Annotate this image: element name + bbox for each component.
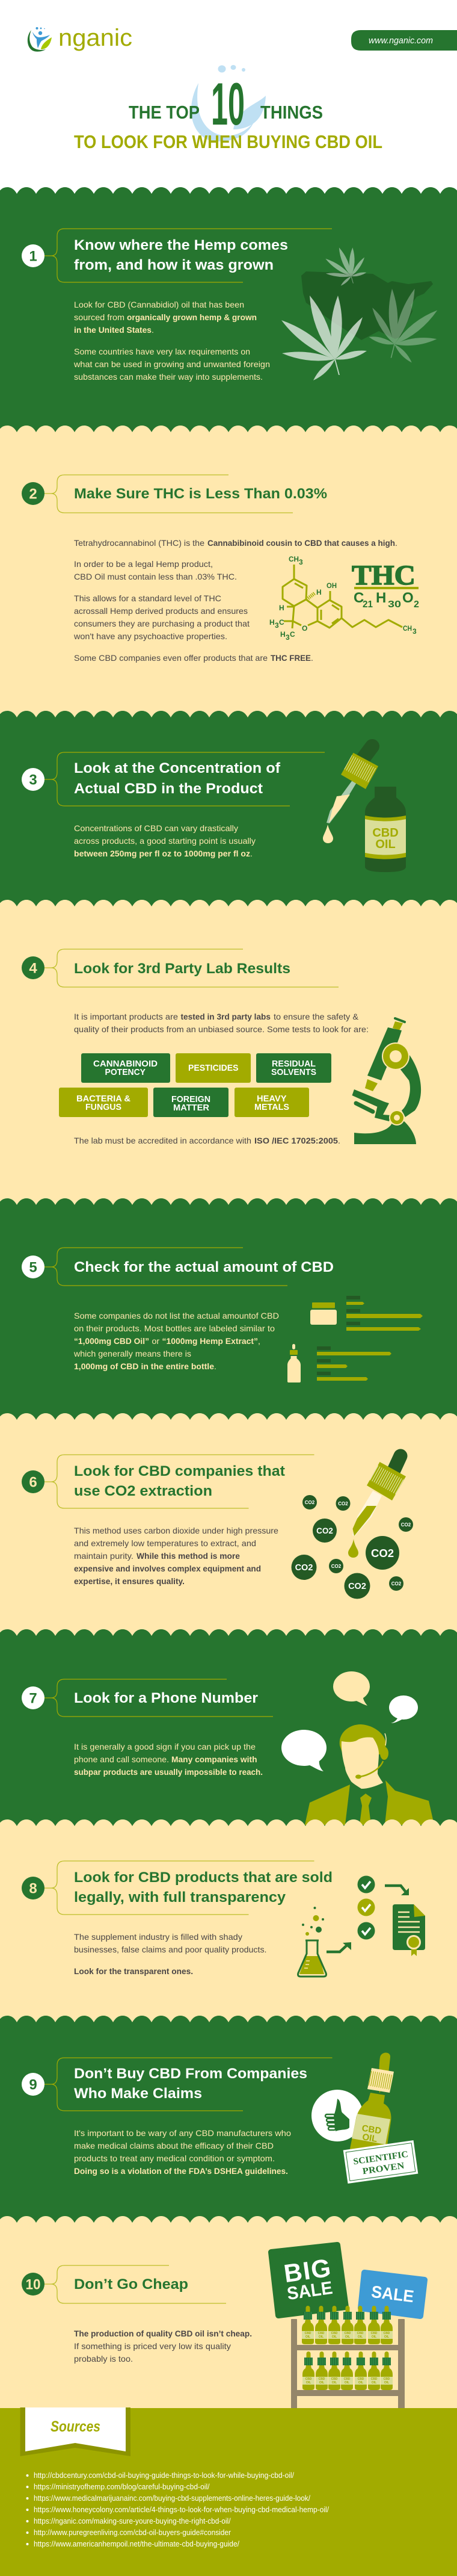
chart: THC molecule: 3 xyxy=(286,633,290,642)
icon: bottle with label bars xyxy=(287,1344,391,1382)
sign: big sale: SALE xyxy=(286,2278,334,2304)
sign: big sale xyxy=(271,2245,346,2315)
panel: step 7 phone number xyxy=(0,1629,457,1828)
accreditation text: . xyxy=(338,1136,340,1145)
shelf with bottles: OIL xyxy=(372,2381,376,2385)
number badge 8 xyxy=(22,1861,314,1915)
body text: Some companies do not list the actual amountof CBD xyxy=(74,1311,279,1321)
heading: Know where the Hemp comes xyxy=(74,237,288,253)
body text: what can be used in growing and unwanted foreign xyxy=(73,359,270,369)
number badge 8: 8 xyxy=(29,1880,37,1897)
heading: Who Make Claims xyxy=(74,2085,202,2102)
body text: Tetrahydrocannabinol (THC) is the xyxy=(74,538,204,548)
body text: It is important products are xyxy=(74,1012,178,1021)
shelf with bottles: OIL xyxy=(306,2381,311,2385)
heading: Actual CBD in the Product xyxy=(74,781,263,797)
icon: CBD oil bottle xyxy=(365,787,406,872)
body text: While this method is more xyxy=(136,1551,240,1561)
title: THINGS xyxy=(260,102,323,123)
body text: This method uses carbon dioxide under high pressure xyxy=(74,1526,278,1535)
body text: The production of quality CBD oil isn’t cheap. xyxy=(74,2329,252,2338)
heading: Look at the Concentration of xyxy=(74,760,281,776)
THC formula: H xyxy=(376,590,386,606)
panel: step 9 medical claims xyxy=(0,2016,457,2225)
tag: foreign matter: FOREIGN xyxy=(171,1094,210,1104)
THC formula: 30 xyxy=(388,599,401,610)
body text: “1000mg Hemp Extract” xyxy=(162,1336,258,1346)
body text: sourced from xyxy=(74,312,124,322)
panel: step 8 legal and transparent xyxy=(0,1819,457,2025)
tag: residual solvents: RESIDUAL xyxy=(272,1059,316,1069)
body text xyxy=(74,1742,263,1777)
source list: https://www.honeycolony.com/article/4-things-to-look-for-when-buying-cbd-medical-hemp-oil/ xyxy=(34,2506,330,2514)
number badge 5 xyxy=(22,1248,287,1286)
body text: . xyxy=(214,1361,216,1371)
shelf with bottles: CBD xyxy=(371,2377,378,2381)
body text: substances can make their way into supplements. xyxy=(74,372,263,382)
title: THE TOP xyxy=(129,102,200,123)
body text: If something is priced very low its quality xyxy=(74,2341,231,2351)
body text: . xyxy=(311,653,313,663)
body text: probably is too. xyxy=(74,2354,133,2364)
icon: CBD oil bottle: CBD xyxy=(361,2123,382,2136)
shelf with bottles: CBD xyxy=(318,2332,325,2335)
shelf with bottles: OIL xyxy=(358,2335,363,2339)
body text: “1,000mg CBD Oil” xyxy=(74,1336,149,1346)
CO2 bubbles: CO2 xyxy=(348,1582,366,1591)
panel: step 10 price xyxy=(0,2216,457,2409)
panel: step 1 hemp origin xyxy=(0,187,457,435)
body text: organically grown hemp & grown xyxy=(127,312,257,322)
body text xyxy=(74,1012,369,1034)
CO2 bubbles: CO2 xyxy=(401,1522,411,1528)
heading: Don’t Buy CBD From Companies xyxy=(74,2066,307,2082)
website pill xyxy=(351,30,457,51)
icon: support agent xyxy=(305,1724,434,1825)
body text xyxy=(74,1932,267,1976)
body text: 1,000mg of CBD in the entire bottle xyxy=(74,1361,214,1371)
body text: in the United States xyxy=(74,325,152,335)
shelf with bottles: CBD xyxy=(305,2377,312,2381)
shelf with bottles: OIL xyxy=(384,2381,389,2385)
heading: Check for the actual amount of CBD xyxy=(74,1259,334,1275)
number badge 1 xyxy=(22,229,332,282)
accreditation text xyxy=(74,1136,340,1145)
tag: pesticides: PESTICIDES xyxy=(188,1063,238,1073)
shelf with bottles: OIL xyxy=(332,2335,337,2339)
shelf with bottles: OIL xyxy=(384,2335,389,2339)
body text: on their products. Most bottles are labeled similar to xyxy=(74,1324,275,1333)
body text xyxy=(73,300,270,382)
chart: THC molecule: C xyxy=(279,618,284,627)
chart: THC molecule: O xyxy=(302,624,307,633)
chart: THC molecule: H xyxy=(280,630,286,639)
chart: THC molecule: H xyxy=(279,604,284,612)
shelf with bottles: CBD xyxy=(305,2332,311,2335)
chart: THC molecule: OH xyxy=(327,581,337,590)
number badge 3: 3 xyxy=(29,772,37,788)
heading: Look for CBD products that are sold xyxy=(74,1869,333,1886)
accreditation text: The lab must be accredited in accordance with xyxy=(74,1136,251,1145)
tag: foreign matter xyxy=(153,1088,228,1117)
illustration: US map and hemp leaves xyxy=(281,247,437,380)
body text: tested in 3rd party labs xyxy=(180,1012,271,1021)
body text xyxy=(73,1311,279,1371)
body text: . xyxy=(152,325,154,335)
number badge 2: 2 xyxy=(29,486,37,502)
shelf with bottles: CBD xyxy=(384,2377,390,2381)
source list xyxy=(26,2471,330,2548)
source list: https://www.americanhempoil.net/the-ultimate-cbd-buying-guide/ xyxy=(34,2540,240,2548)
heading xyxy=(74,2066,307,2102)
body text: subpar products are usually impossible to reach. xyxy=(74,1767,263,1777)
body text: This allows for a standard level of THC xyxy=(74,593,221,603)
title: TO LOOK FOR WHEN BUYING CBD OIL xyxy=(74,131,382,152)
number badge 6 xyxy=(22,1455,314,1508)
tag: heavy metals: HEAVY xyxy=(257,1094,286,1104)
CO2 bubbles: CO2 xyxy=(391,1581,402,1587)
CO2 bubbles: CO2 xyxy=(338,1501,348,1506)
chart: THC molecule: 3 xyxy=(413,627,417,636)
body text xyxy=(74,1526,278,1586)
chart: THC molecule: C xyxy=(290,630,295,639)
shelf with bottles: OIL xyxy=(332,2381,337,2385)
body text: Cannabibinoid cousin to CBD that causes a high xyxy=(207,538,395,548)
logo: nganic xyxy=(58,25,132,51)
shelf with bottles: CBD xyxy=(358,2377,364,2381)
body text xyxy=(73,538,397,663)
heading xyxy=(74,1869,333,1906)
body text: Some countries have very lax requirements on xyxy=(74,347,250,356)
panel: step 4 lab results xyxy=(0,900,457,1207)
stamp: scientific proven: PROVEN xyxy=(362,2161,405,2176)
CO2 bubbles: CO2 xyxy=(371,1547,394,1559)
chart: THC molecule xyxy=(269,555,417,642)
tag: pesticides xyxy=(176,1053,251,1083)
tag: cannabinoid potency: CANNABINOID xyxy=(93,1059,158,1069)
body text: . xyxy=(250,849,253,858)
icon: CBD oil bottle: OIL xyxy=(361,2132,378,2144)
heading: use CO2 extraction xyxy=(74,1483,212,1499)
number badge 3 xyxy=(22,752,325,806)
body text: won't have any psychoactive properties. xyxy=(73,631,227,641)
THC formula: C xyxy=(354,590,364,606)
heading: legally, with full transparency xyxy=(74,1889,286,1906)
CO2 bubbles: CO2 xyxy=(295,1563,313,1573)
shelf with bottles: CBD xyxy=(331,2332,338,2335)
body text: Doing so is a violation of the FDA’s DSHEA guidelines. xyxy=(74,2166,288,2176)
icon: dropper xyxy=(323,746,378,843)
arrow: checklist to certificate xyxy=(385,1886,409,1895)
THC formula: 2 xyxy=(414,599,419,610)
number badge 4 xyxy=(22,949,339,987)
number badge 1: 1 xyxy=(29,248,37,265)
sources ribbon: Sources xyxy=(51,2418,100,2435)
number badge 7: 7 xyxy=(29,1690,37,1707)
icon: thumbs up xyxy=(311,2090,363,2141)
shelf with bottles: CBD xyxy=(344,2377,351,2381)
source list: http://www.puregreenliving.com/cbd-oil-buyers-guide#consider xyxy=(34,2528,231,2537)
chart: THC molecule: CH xyxy=(289,555,299,563)
CO2 bubbles xyxy=(291,1495,413,1599)
THC formula: 21 xyxy=(363,599,373,610)
panel: step 3 concentration xyxy=(0,711,457,909)
panel: step 5 actual amount xyxy=(0,1198,457,1423)
website pill: www.nganic.com xyxy=(369,36,433,46)
sign: big sale: BIG xyxy=(282,2253,333,2288)
tag: bacteria and fungus: FUNGUS xyxy=(85,1102,121,1112)
panel: step 2 THC xyxy=(0,426,457,720)
title xyxy=(74,70,382,152)
CO2 bubbles: CO2 xyxy=(331,1564,342,1569)
chart: THC molecule: H xyxy=(316,588,322,596)
chart: THC molecule: 3 xyxy=(275,621,279,630)
shelf with bottles: CBD xyxy=(319,2377,325,2381)
source list: https://nganic.com/making-sure-youre-buying-the-right-cbd-oil/ xyxy=(34,2517,231,2525)
icon: dropper with drop xyxy=(348,1456,406,1558)
heading: from, and how it was grown xyxy=(74,257,274,273)
arrow: flask to checklist xyxy=(327,1942,351,1952)
body text: to ensure the safety & xyxy=(274,1012,359,1021)
body text: It's important to be wary of any CBD manufacturers who xyxy=(74,2128,291,2138)
tag: cannabinoid potency: POTENCY xyxy=(105,1067,146,1077)
panel: header xyxy=(28,25,457,152)
body text: consumers they are purchasing a product that xyxy=(74,619,250,628)
body text: Look for the transparent ones. xyxy=(74,1966,193,1976)
body text: In order to be a legal Hemp product, xyxy=(74,559,213,569)
heading: Make Sure THC is Less Than 0.03% xyxy=(74,486,327,502)
number badge 10: 10 xyxy=(25,2276,41,2293)
number badge 9: 9 xyxy=(29,2076,37,2093)
shelf with bottles: OIL xyxy=(319,2381,324,2385)
source list: https://www.medicalmarijuanainc.com/buying-cbd-supplements-online-heres-guide-look/ xyxy=(34,2494,310,2503)
chart: THC molecule: 3 xyxy=(299,558,303,566)
body text: across products, a good starting point is usually xyxy=(74,836,256,846)
title: 10 xyxy=(211,70,245,137)
sign: sale xyxy=(361,2273,425,2316)
icon: CBD oil bottle: CBD xyxy=(372,826,399,840)
body text: expertise, it ensures quality. xyxy=(74,1576,185,1586)
shelf with bottles: OIL xyxy=(319,2335,324,2339)
shelf with bottles: OIL xyxy=(372,2335,376,2339)
speech bubbles xyxy=(281,1671,418,1771)
number badge 2 xyxy=(22,475,293,513)
body text xyxy=(74,2128,291,2176)
body text: products to treat any medical condition or symptom. xyxy=(74,2153,275,2163)
panel: step 6 CO2 extraction xyxy=(0,1413,457,1639)
source list: http://cbdcentury.com/cbd-oil-buying-guide-things-to-look-for-while-buying-cbd-oil/ xyxy=(34,2471,295,2480)
chart: THC molecule: CH xyxy=(403,624,412,633)
number badge 6: 6 xyxy=(29,1475,37,1490)
logo xyxy=(28,25,132,52)
tag: residual solvents xyxy=(256,1053,331,1083)
body text: make medical claims about the efficacy of their CBD xyxy=(74,2141,274,2150)
shelf with bottles: CBD xyxy=(371,2332,378,2335)
body text: or xyxy=(152,1336,159,1346)
body text: acrossall Hemp derived products and ensures xyxy=(74,606,248,616)
shelf with bottles: OIL xyxy=(345,2335,350,2339)
body text: maintain purity. xyxy=(74,1551,133,1561)
icon: CBD oil bottle: OIL xyxy=(375,838,396,851)
body text: Look for CBD (Cannabidiol) oil that has been xyxy=(74,300,244,309)
body text: expensive and involves complex equipment and xyxy=(74,1564,261,1573)
tag: residual solvents: SOLVENTS xyxy=(271,1067,316,1077)
sign: sale: SALE xyxy=(370,2282,415,2306)
THC formula: THC xyxy=(352,560,416,591)
shelf with bottles: OIL xyxy=(358,2381,363,2385)
watermark logo xyxy=(191,65,266,141)
shelf with bottles: CBD xyxy=(331,2377,338,2381)
icon: checklist xyxy=(357,1875,375,1939)
THC formula xyxy=(352,560,419,610)
icon: jar with label bars xyxy=(310,1296,423,1331)
body text: which generally means there is xyxy=(73,1349,191,1358)
icon: flask xyxy=(298,1907,326,1977)
CO2 bubbles: CO2 xyxy=(316,1526,333,1535)
panel: sources xyxy=(0,2407,457,2576)
number badge 5: 5 xyxy=(29,1259,37,1276)
body text: Many companies with xyxy=(171,1754,257,1764)
body text: CBD Oil must contain less than .03% THC. xyxy=(74,572,237,581)
shelf with bottles: OIL xyxy=(305,2335,310,2339)
source list: https://ministryofhemp.com/blog/careful-buying-cbd-oil/ xyxy=(34,2483,210,2491)
accreditation text: ISO /IEC 17025:2005 xyxy=(254,1136,338,1145)
THC formula: O xyxy=(402,590,414,606)
body text: between 250mg per fl oz to 1000mg per fl oz xyxy=(74,849,250,858)
body text: The supplement industry is filled with shady xyxy=(74,1932,242,1942)
shelf with bottles: CBD xyxy=(357,2332,364,2335)
tag: bacteria and fungus xyxy=(59,1088,148,1117)
chart: THC molecule: H xyxy=(269,618,275,627)
body text: Concentrations of CBD can vary drastically xyxy=(74,823,238,833)
body text: phone and call someone. xyxy=(74,1754,169,1764)
stamp: scientific proven xyxy=(343,2140,418,2184)
body text: , xyxy=(258,1336,260,1346)
number badge 7 xyxy=(22,1679,273,1717)
body text: Some CBD companies even offer products that are xyxy=(74,653,268,663)
shelf with bottles: CBD xyxy=(345,2332,351,2335)
body text: THC FREE xyxy=(271,653,311,663)
heading xyxy=(74,760,281,797)
heading: Look for CBD companies that xyxy=(74,1463,285,1479)
tag: foreign matter: MATTER xyxy=(173,1103,209,1113)
shelf with bottles xyxy=(291,2306,405,2409)
tag: cannabinoid potency xyxy=(81,1053,170,1083)
tag: heavy metals: METALS xyxy=(254,1102,289,1112)
heading: Look for a Phone Number xyxy=(74,1690,258,1706)
body text: It is generally a good sign if you can pick up the xyxy=(74,1742,256,1751)
heading xyxy=(74,1463,285,1499)
body text xyxy=(74,2329,252,2364)
icon: CBD oil bottle xyxy=(349,2052,394,2161)
body text: . xyxy=(395,538,397,548)
tag: bacteria and fungus: BACTERIA & xyxy=(76,1094,130,1104)
number badge 9 xyxy=(22,2058,332,2111)
body text: businesses, false claims and poor quality products. xyxy=(74,1945,267,1954)
icon: certificate xyxy=(393,1904,425,1956)
tag: heavy metals xyxy=(235,1088,309,1117)
heading: Look for 3rd Party Lab Results xyxy=(74,961,290,977)
sources ribbon xyxy=(20,2407,130,2456)
CO2 bubbles: CO2 xyxy=(305,1500,315,1505)
shelf with bottles: OIL xyxy=(345,2381,349,2385)
number badge 4: 4 xyxy=(29,961,37,976)
body text: and extremely low temperatures to extract, and xyxy=(74,1538,256,1548)
heading xyxy=(74,237,288,273)
shelf with bottles: CBD xyxy=(384,2332,390,2335)
icon: microscope xyxy=(352,1018,421,1144)
stamp: scientific proven: SCIENTIFIC xyxy=(352,2150,409,2167)
test tags xyxy=(59,1053,331,1117)
body text: quality of their products from an unbiased source. Some tests to look for are: xyxy=(74,1024,369,1034)
heading: Don’t Go Cheap xyxy=(74,2276,188,2293)
number badge 10 xyxy=(22,2265,226,2303)
body text xyxy=(74,823,256,858)
